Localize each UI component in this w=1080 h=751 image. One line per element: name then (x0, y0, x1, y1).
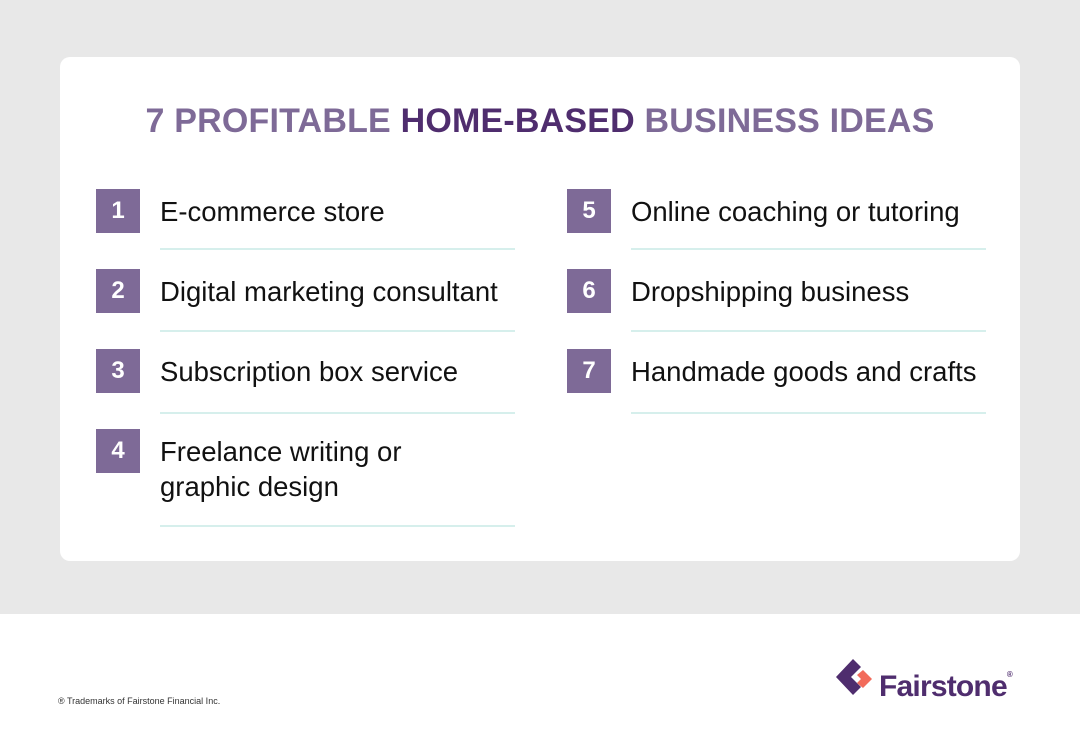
item 4: 4 (111, 437, 125, 464)
item 6: 6 (582, 277, 596, 304)
item 2 (96, 269, 515, 332)
item 1: E-commerce store (160, 196, 385, 227)
item 4: Freelance writing or (160, 436, 401, 467)
footer trademark text: ® Trademarks of Fairstone Financial Inc. (58, 696, 220, 706)
item 4 (96, 429, 515, 527)
item 4: graphic design (160, 471, 339, 502)
item 1: 1 (111, 197, 125, 224)
item 5: Online coaching or tutoring (631, 196, 960, 227)
icon: diamond (836, 659, 872, 695)
item 3: Subscription box service (160, 356, 458, 387)
item 7: Handmade goods and crafts (631, 356, 976, 387)
title: 7 PROFITABLE HOME-BASED BUSINESS IDEAS (145, 102, 935, 140)
item 2: Digital marketing consultant (160, 276, 498, 307)
item 3 (96, 349, 515, 414)
logo wordmark: Fairstone® (879, 670, 1012, 703)
item 7 (567, 349, 986, 414)
item 2: 2 (111, 277, 125, 304)
item 5 (567, 189, 986, 250)
card panel (60, 57, 1020, 561)
item 6: Dropshipping business (631, 276, 909, 307)
item 5: 5 (582, 197, 596, 224)
item 3: 3 (111, 357, 125, 384)
logo: Fairstone (836, 659, 1013, 703)
item 7: 7 (582, 357, 596, 384)
item 1 (96, 189, 515, 250)
item 6 (567, 269, 986, 332)
